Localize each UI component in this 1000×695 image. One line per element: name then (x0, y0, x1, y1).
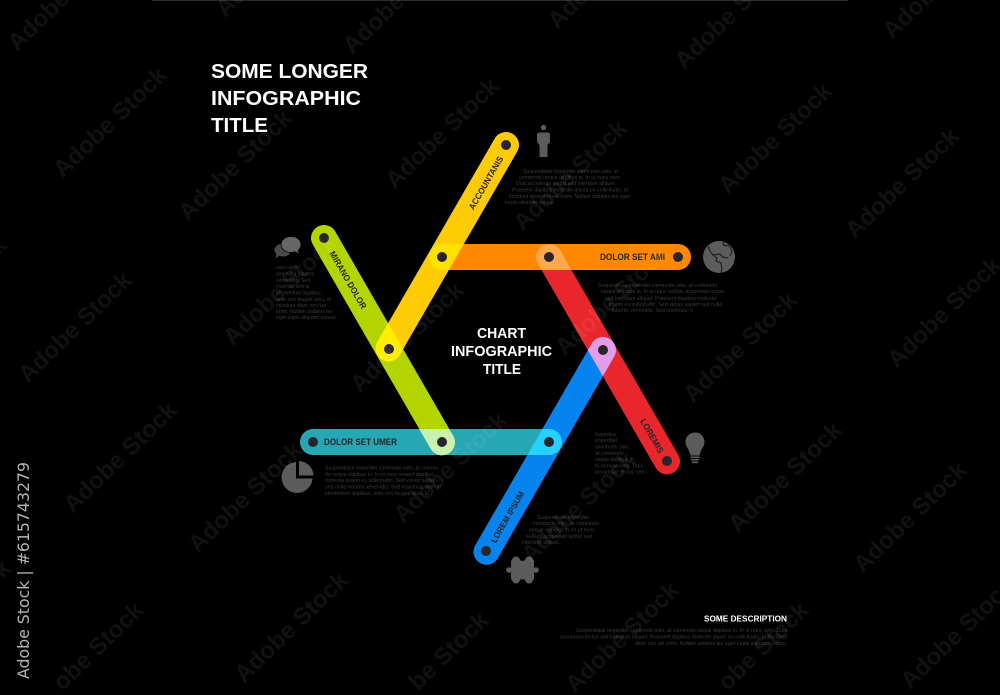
icon: speech bubbles (274, 236, 301, 258)
text: loremis: commodo odio, (595, 444, 630, 450)
watermarks: obe Stock (48, 596, 150, 695)
text: loremis: neque dapibus in. (595, 457, 635, 463)
text: lorem ipsum: seDuis accumsan lectus sed (526, 534, 592, 540)
watermarks: Adobe Stock (13, 266, 138, 388)
description heading: SOME DESCRIPTION (704, 614, 787, 624)
text: mirano dolor: tincidunt diam orci vel (276, 303, 326, 309)
text: dolor set umer: do neque dapibus in. In ut nunc sesent dapibus (325, 472, 434, 478)
hexagonal bar chart (300, 127, 691, 570)
text: accountanis: Praesent dapibus molestie ipsum eu sollicitudin, id (512, 188, 628, 194)
text: dolor set ami: neque dapibus in. In ut nunc seDuis accumsan lectus (601, 289, 724, 295)
watermarks: Adobe Stock (516, 446, 641, 568)
text: loremis: accumsan lectus sed i (595, 470, 647, 476)
watermarks: Adobe Stock (550, 239, 675, 361)
text: dolor set umer: Suspendisse imperdiet commodo odio, at commo- (325, 466, 440, 472)
overlap: yellow and orange (429, 244, 464, 270)
watermarks: Adobe Stock (345, 276, 470, 398)
bar: red (531, 239, 685, 479)
bar: yellow (371, 127, 524, 366)
text: mirano dolor: maximus, nibh at (276, 284, 309, 290)
bar label: mirano dolor: MIRANO DOLOR (327, 249, 369, 311)
watermarks: Adobe Stock (380, 72, 505, 194)
title: SOME LONGER (211, 61, 369, 83)
overlap: yellow and green (376, 323, 404, 362)
icon: light bulb (686, 432, 704, 463)
chart title: INFOGRAPHIC (451, 344, 553, 360)
text: lorem ipsum: interdum aliquet. (522, 540, 560, 546)
icon: pie chart (282, 461, 314, 493)
watermarks: Adobe Stock (678, 286, 803, 408)
watermarks: Adobe Stock (229, 566, 354, 688)
bar label: loremis: LOREMIS (638, 417, 666, 455)
icon: puzzle piece (506, 556, 539, 584)
overlap: green and teal (419, 429, 455, 455)
text: accountanis: tincidunt diam orci vel enim. Nullam sodales leo eget (509, 194, 630, 200)
description text (560, 628, 787, 647)
title (211, 61, 369, 137)
watermarks: Adobe Stock (848, 456, 973, 578)
text: loremis (595, 432, 647, 476)
text: mirano dolor: varius sapien (276, 265, 298, 271)
text: mirano dolor: venenatis. Sed (276, 278, 310, 284)
text: dolor set umer: elementum dapibus, ante orci feugiat arcu, id (325, 491, 429, 497)
text: lorem ipsum: Suspendisse imperdiet (537, 515, 589, 521)
title: INFOGRAPHIC (211, 88, 361, 110)
text: lorem ipsum: commodo odio, at commodo (533, 521, 599, 527)
bar: blue (469, 332, 621, 570)
watermarks: be Stock (403, 606, 495, 695)
text: dolor set umer: molestie ipsum eu sollicitudin. Sed varius sapien (325, 478, 437, 484)
text: accountanis: Duis accumsan lectus sed interdum aliquet. (516, 181, 616, 187)
text: loremis: at commodo (595, 451, 624, 457)
text: lorem ipsum: neque dapibus in. In ut nunc (529, 528, 595, 534)
text: accountanis: turpis aliquam cursus. (505, 200, 555, 206)
bar label: accountanis: ACCOUNTANIS (467, 154, 505, 211)
watermarks: Adobe Stock (508, 114, 633, 236)
watermarks: Adobe Stock (218, 229, 343, 351)
description text: Suspendisse imperdiet commodo odio, at commodo neque dapibus in. In ut nunc sem. Duis (576, 628, 787, 634)
node dots (308, 140, 683, 556)
watermarks: Adobe Stock (58, 396, 183, 518)
text: dolor set ami: ipsum eu sollicitudin. Sed varius sapien sed nulla (609, 302, 723, 308)
title: TITLE (211, 115, 268, 137)
bar: teal (300, 429, 562, 455)
text: loremis: In ut nunc sem. Duis (595, 464, 643, 470)
text: dolor set ami (598, 283, 724, 314)
overlap: orange and red (536, 244, 572, 270)
text: mirano dolor: elementum dapibus, (276, 290, 322, 296)
watermarks: Adobe Stock (723, 416, 848, 538)
watermarks: Adobe Stock (388, 406, 513, 528)
overlap: blue and red (588, 337, 616, 376)
chart title: CHART (477, 326, 526, 342)
text: accountanis: Suspendisse imperdiet commodo odio, at (523, 169, 618, 175)
text: dolor set ami: sed interdum aliquet. Praesent dapibus molestie (605, 296, 717, 302)
bar label: dolor set umer: DOLOR SET UMER (324, 437, 398, 447)
watermarks: Adobe Stock (560, 576, 685, 695)
text: dolor set ami: Suspendisse imperdiet commodo odio, at commodo (598, 283, 717, 289)
icon: globe (703, 241, 735, 273)
watermarks: obe Stock (713, 596, 815, 695)
watermarks: Adobe Stock (713, 77, 838, 199)
text: dolor set ami: lobortis venenatis. Sed maximus, n (612, 308, 693, 314)
watermarks: Adobe Stock (183, 436, 308, 558)
text: mirano dolor: ante orci feugiat arcu, id (276, 297, 331, 303)
watermarks: Adobe Stock (173, 104, 298, 226)
text: mirano dolor: sed nulla lobortis (276, 272, 314, 278)
description text: accumsan lectus sed interdum aliquet. Praesent dapibus molestie ipsum eu sollicitudin, id tincidunt (560, 634, 787, 640)
chart title: TITLE (483, 362, 521, 378)
text: dolor set umer (325, 466, 441, 497)
bar label: dolor set ami: DOLOR SET AMI (600, 252, 665, 262)
text: accountanis: commodo neque dapibus in. In ut nunc sem. (519, 175, 621, 181)
text: mirano dolor: eget turpis aliquam cursus. (276, 315, 337, 321)
bar: orange (429, 244, 691, 270)
bar label: lorem ipsum: LOREM IPSUM (489, 489, 526, 545)
text: lorem ipsum (522, 515, 599, 546)
watermarks: Adobe Stock (840, 122, 965, 244)
text: mirano dolor (276, 265, 337, 321)
text: dolor set umer: sed nulla lobortis venenatis. Sed maximus, nibh at (325, 484, 441, 490)
stock id caption: Adobe Stock | #615743279 (14, 462, 33, 679)
text: mirano dolor: enim. Nullam sodales leo (276, 309, 333, 315)
text: loremis: imperdiet (595, 438, 617, 444)
text: accountanis (505, 169, 630, 206)
bar: green (306, 220, 460, 460)
description text: diam orci vel enim. Nullam sodales leo eget turpis aliquam cursus. (635, 641, 787, 647)
text: loremis: Suspendisse (595, 432, 616, 438)
overlap: teal and blue (528, 429, 562, 455)
icon: person (537, 125, 550, 157)
chart title (451, 326, 553, 378)
watermarks: Adobe Stock (48, 61, 173, 183)
